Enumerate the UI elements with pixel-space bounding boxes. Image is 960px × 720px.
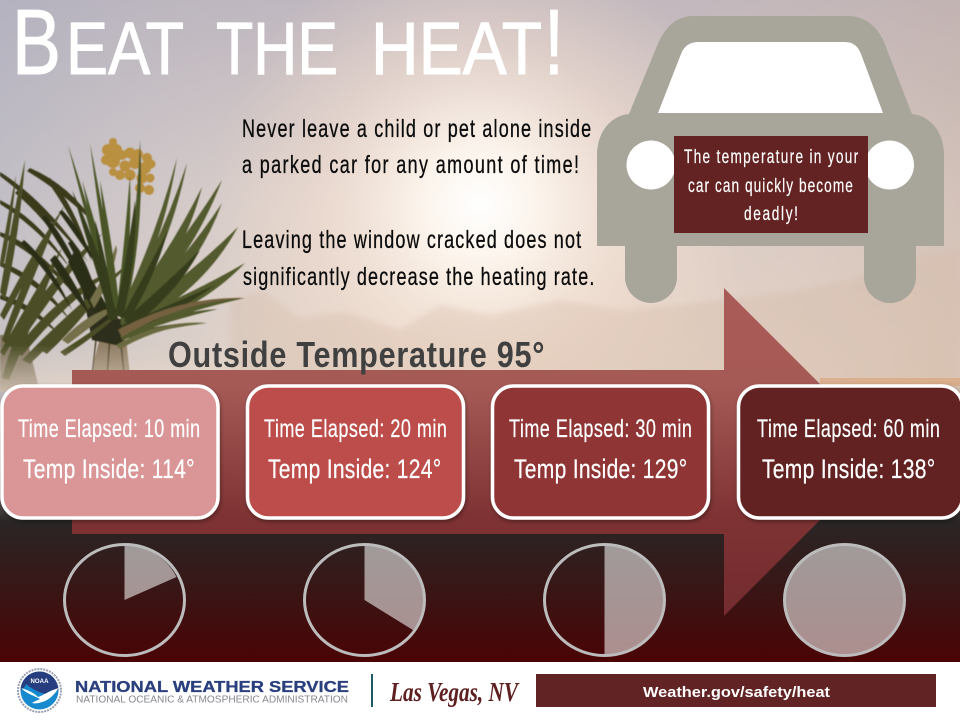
warning text: Leaving the window cracked does not [242, 225, 581, 254]
card: 30 minutes: Time Elapsed: 30 min [509, 414, 692, 443]
callout: deadly temperature: car can quickly become [688, 175, 853, 197]
card: 60 minutes: Temp Inside: 138° [762, 455, 935, 485]
card: 60 minutes: Time Elapsed: 60 min [757, 414, 940, 443]
link bar [536, 674, 936, 707]
link bar: Weather.gov/safety/heat [643, 684, 830, 701]
card: 20 minutes: Time Elapsed: 20 min [264, 414, 447, 443]
pie chart: 20 of 60 minutes [304, 544, 425, 656]
callout: deadly temperature: deadly! [744, 203, 798, 225]
icon: NOAA logo [18, 669, 61, 712]
title [12, 0, 564, 94]
pie chart: 60 of 60 minutes [784, 544, 904, 656]
warning text [242, 114, 594, 291]
card: 10 minutes: Temp Inside: 114° [23, 455, 195, 485]
card: 10 minutes: Time Elapsed: 10 min [18, 414, 200, 443]
title: THE [216, 7, 338, 90]
warning text: a parked car for any amount of time! [242, 150, 579, 179]
card: 30 minutes [492, 386, 708, 518]
title: EAT [66, 7, 184, 90]
pie chart: 10 of 60 minutes [64, 544, 184, 656]
title: HEAT [371, 7, 542, 90]
icon: car [597, 16, 944, 303]
callout: deadly temperature [674, 136, 868, 233]
card: 10 minutes [2, 386, 218, 518]
callout: deadly temperature: The temperature in your [684, 146, 859, 168]
wordmark: National Weather Service [75, 679, 349, 706]
wordmark: National Weather Service: NATIONAL OCEANIC & ATMOSPHERIC ADMINISTRATION [76, 694, 348, 706]
arrow: time progression [72, 288, 888, 616]
heading: outside temperature: Outside Temperature 95° [168, 336, 545, 376]
card: 20 minutes: Temp Inside: 124° [268, 455, 441, 485]
warning text: significantly decrease the heating rate. [243, 262, 594, 291]
location label: Las Vegas, NV [389, 677, 520, 707]
wordmark: National Weather Service: NATIONAL WEATHER SERVICE [75, 679, 349, 696]
card: 30 minutes: Temp Inside: 129° [514, 455, 687, 485]
pie chart: 30 of 60 minutes [544, 544, 665, 656]
card: 20 minutes [248, 386, 464, 518]
icon: NOAA logo: NOAA [30, 678, 49, 685]
footer band [0, 662, 960, 720]
card: 60 minutes [738, 386, 960, 518]
warning text: Never leave a child or pet alone inside [242, 114, 591, 143]
illustration: yucca plant [0, 138, 245, 392]
